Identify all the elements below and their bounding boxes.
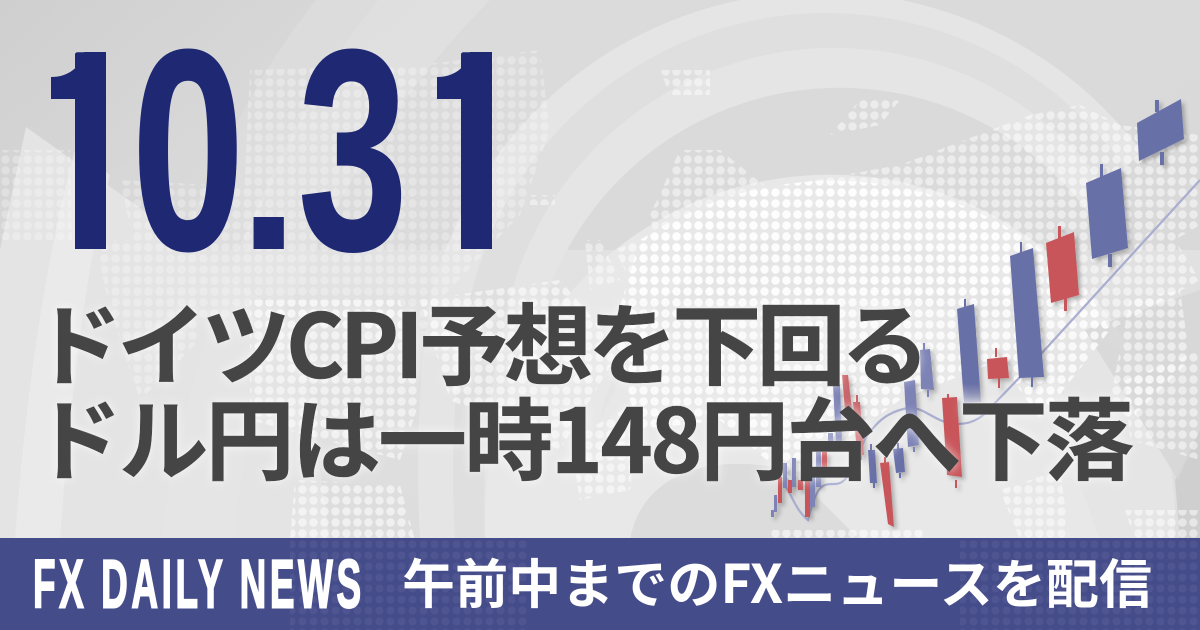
blue candle 1: [1137, 99, 1184, 165]
red candle 1: [1046, 226, 1079, 311]
date: 1: [23, 0, 147, 310]
headline line 1: ドイツCPI予想を下回る: [33, 275, 930, 404]
headline line 2: ドル円は一時148円台へ下落: [33, 370, 1134, 499]
left swoosh wedge: [0, 127, 330, 540]
candlestick chart: [771, 99, 1200, 527]
trend line: [783, 180, 1200, 520]
blue candle 3: [1010, 242, 1044, 387]
headline: [33, 275, 1134, 499]
footer label: FX DAILY NEWS: [33, 545, 365, 622]
red candle 2: [987, 348, 1009, 388]
blue candle 2: [1086, 164, 1128, 267]
dotted world map: [0, 50, 1200, 540]
large ring band: [105, 0, 378, 540]
date: 1: [409, 0, 533, 310]
red candle 3: [942, 394, 962, 488]
small candles: [771, 375, 905, 527]
date: 3: [298, 0, 408, 311]
footer description: 午前中までのFXニュースを配信: [402, 543, 1152, 619]
blue candle 6: [904, 380, 919, 452]
globe: [485, 175, 1175, 540]
blue candle 4: [957, 299, 981, 403]
footer bar: [0, 538, 1200, 630]
blue candle 5: [920, 343, 934, 397]
date: .: [239, 56, 299, 295]
date: [51, 48, 492, 253]
